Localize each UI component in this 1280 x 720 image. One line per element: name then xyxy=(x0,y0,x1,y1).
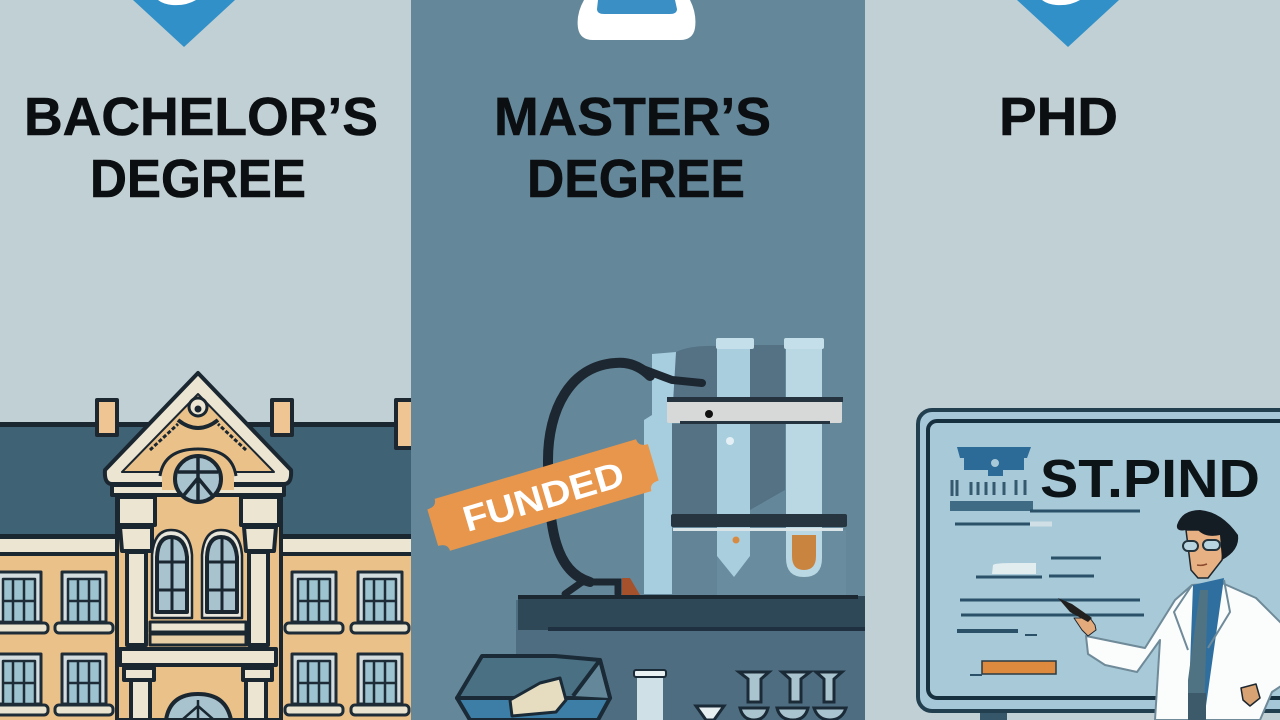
illustration: laboratory xyxy=(425,338,865,720)
orange board label xyxy=(970,661,1056,675)
graduated cylinder xyxy=(634,670,666,720)
test tubes xyxy=(716,338,824,577)
heading: master's degree: MASTER’S xyxy=(494,87,771,147)
rack pole xyxy=(644,352,676,594)
roof xyxy=(0,422,411,539)
pediment xyxy=(105,373,291,490)
left windows xyxy=(0,572,113,715)
glow under rack xyxy=(672,530,846,596)
heading: bachelor's degree: BACHELOR’S xyxy=(24,87,378,147)
funded tag: FUNDED xyxy=(458,453,629,540)
panel: master's degree xyxy=(411,0,865,720)
cornice xyxy=(0,539,411,556)
board stand xyxy=(980,712,1007,720)
icon: master's white and blue badge xyxy=(578,0,695,40)
pointing hand and pen xyxy=(1058,598,1096,636)
lab coat xyxy=(1086,583,1280,720)
hip hand xyxy=(1241,684,1260,706)
heading: bachelor's degree: DEGREE xyxy=(90,149,306,209)
lower rack shelf xyxy=(671,514,847,531)
icon: bachelor's blue pin xyxy=(133,0,235,47)
heading: phd: PHD xyxy=(999,87,1118,147)
shadow behind equipment xyxy=(672,345,785,596)
microscope base accent xyxy=(622,578,640,595)
heading: master's degree: DEGREE xyxy=(527,149,745,209)
small stands xyxy=(739,672,846,720)
wall xyxy=(0,553,411,720)
illustration: scientist xyxy=(1058,510,1280,720)
funnel xyxy=(696,706,724,720)
round window xyxy=(174,454,222,502)
white highlight on board xyxy=(992,563,1036,574)
right windows xyxy=(285,572,409,715)
illustration: university building xyxy=(0,373,416,720)
arched windows xyxy=(152,530,242,618)
upper rack shelf xyxy=(667,397,843,424)
icon: phd blue pin xyxy=(1017,0,1119,47)
chimneys xyxy=(97,400,416,448)
funded tag xyxy=(425,436,661,554)
head xyxy=(1177,510,1238,578)
central portico xyxy=(112,480,284,720)
microscope arm xyxy=(548,363,702,594)
board logo xyxy=(950,447,1033,511)
board frame xyxy=(918,410,1280,711)
lab bench xyxy=(516,595,865,720)
heading: master's degree xyxy=(494,87,771,209)
shirt and tie xyxy=(1188,578,1224,720)
board text lines xyxy=(955,511,1144,635)
coat lapels xyxy=(1174,580,1230,650)
panel: phd xyxy=(865,0,1280,720)
entrance arch xyxy=(166,694,231,720)
illustration: presentation board xyxy=(918,410,1280,720)
heading: bachelor's degree xyxy=(24,87,378,209)
panel: bachelor's degree xyxy=(0,0,416,720)
board title: ST.PIND xyxy=(1040,449,1260,509)
tray with cloth xyxy=(457,656,610,720)
